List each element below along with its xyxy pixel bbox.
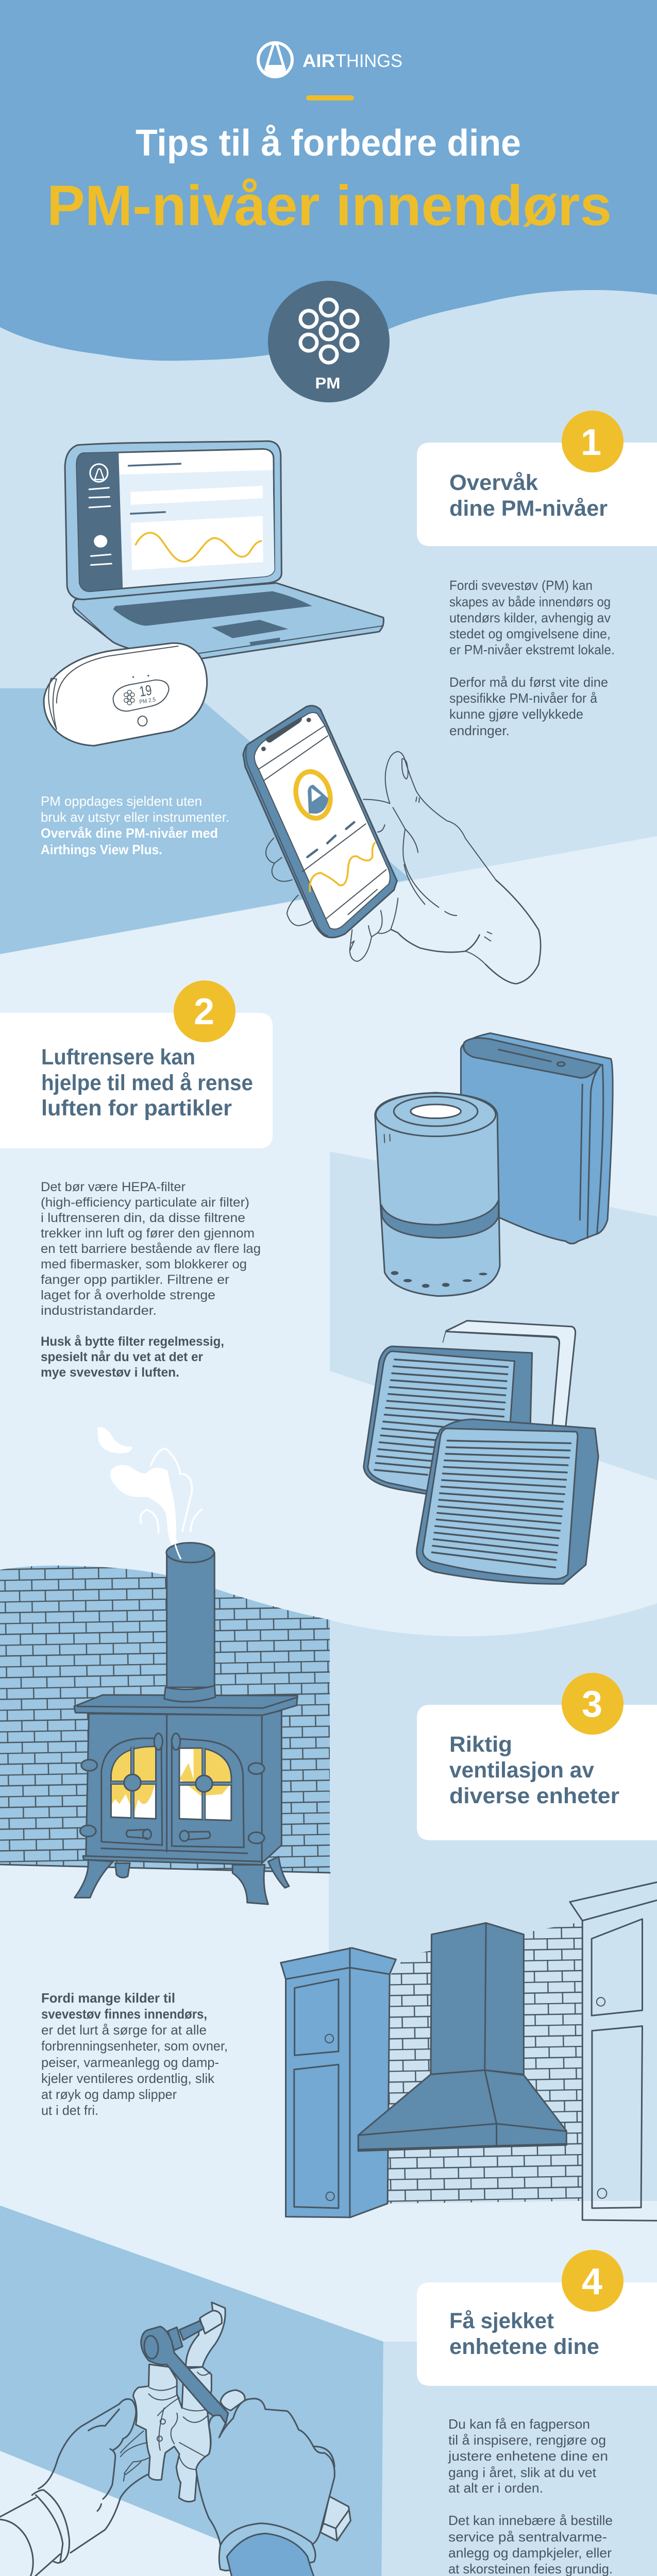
text: tip 2 body: Husk å bytte filter regelmessig,: [41, 1334, 224, 1349]
panel: tip 3 heading card: Riktig: [449, 1732, 512, 1757]
text: tip 1 body: kunne gjøre vellykkede: [449, 706, 583, 722]
callout: monitor with View Plus: Airthings View Plus.: [41, 842, 162, 857]
badge 3: [562, 1673, 624, 1735]
text: tip 3 body: Fordi mange kilder til: [41, 1990, 175, 2006]
panel: tip 3 heading card: [417, 1673, 657, 1840]
text: tip 2 body: trekker inn luft og fører den gjennom: [41, 1226, 255, 1241]
panel: tip 4 heading card: [417, 2250, 657, 2386]
text: tip 1 body: utendørs kilder, avhengig av: [449, 610, 611, 625]
text: tip 1 body: endringer.: [449, 723, 510, 738]
illustration: hands tightening pipe with wrench: [0, 2302, 350, 2576]
text: tip 4 body: [448, 2416, 613, 2576]
text: tip 1 body: [449, 578, 615, 738]
title: Tips til å forbedre dine: [136, 123, 521, 164]
panel: tip 2 heading card: Luftrensere kan: [41, 1045, 195, 1070]
text: tip 2 body: fanger opp partikler. Filtrene er: [41, 1273, 229, 1287]
accent bar: [306, 95, 354, 100]
text: tip 4 body: service på sentralvarme-: [448, 2529, 607, 2545]
logo: Airthings header: AIR: [302, 51, 335, 71]
device reading: PM 2.5: [139, 697, 156, 705]
panel: tip 1 heading card: [417, 411, 657, 546]
illustration: wood stove: [74, 1427, 297, 1904]
badge 1: 1: [581, 422, 601, 463]
illustration: Airthings View Plus device: [44, 643, 207, 745]
panel: tip 2 heading card: [0, 980, 273, 1148]
text: tip 4 body: til å inspisere, rengjøre og: [448, 2432, 606, 2448]
panel: tip 4 heading card: Få sjekket: [449, 2309, 554, 2333]
text: tip 3 body: peiser, varmeanlegg og damp-: [41, 2055, 219, 2070]
text: tip 3 body: er det lurt å sørge for at alle: [41, 2022, 207, 2038]
illustration: laptop: [65, 441, 383, 659]
panel: tip 3 heading card: ventilasjon av: [449, 1758, 594, 1783]
text: tip 2 body: spesielt når du vet at det er: [41, 1350, 203, 1364]
callout: monitor with View Plus: Overvåk dine PM-nivåer med: [41, 825, 218, 841]
illustration: replacement filters: [364, 1320, 598, 1584]
text: tip 4 body: anlegg og dampkjeler, eller: [448, 2545, 612, 2561]
panel: tip 2 heading card: luften for partikler: [41, 1096, 232, 1121]
illustration: hand holding phone: [243, 706, 541, 984]
title: [47, 123, 612, 238]
text: tip 2 body: laget for å overholde strenge: [41, 1288, 215, 1302]
text: tip 2 body: med fibermasker, som blokkerer og: [41, 1257, 247, 1272]
text: tip 1 body: skapes av både innendørs og: [449, 594, 611, 609]
text: tip 2 body: i luftrenseren din, da disse filtrene: [41, 1211, 245, 1225]
icon: PM particles badge: PM: [315, 374, 340, 392]
text: tip 3 body: at røyk og damp slipper: [41, 2087, 177, 2102]
panel: tip 1 heading card: Overvåk: [449, 470, 538, 495]
text: tip 2 body: mye svevestøv i luften.: [41, 1365, 179, 1380]
text: tip 2 body: Det bør være HEPA-filter: [41, 1180, 186, 1194]
panel: tip 2 heading card: hjelpe til med å rense: [41, 1071, 253, 1095]
logo: Airthings header: [258, 43, 402, 77]
text: tip 4 body: justere enhetene dine en: [448, 2448, 608, 2464]
illustration: range hood: [358, 1923, 566, 2151]
badge 3: 3: [582, 1684, 602, 1725]
badge 2: [174, 980, 235, 1042]
text: tip 2 body: industristandarder.: [41, 1303, 157, 1318]
text: tip 1 body: Derfor må du først vite dine: [449, 674, 608, 690]
text: tip 1 body: stedet og omgivelsene dine,: [449, 626, 611, 641]
text: tip 3 body: kjeler ventileres ordentlig, slik: [41, 2071, 215, 2086]
badge 1: [562, 411, 624, 472]
text: tip 4 body: Du kan få en fagperson: [448, 2416, 590, 2432]
text: tip 2 body: (high-efficiency particulate air filter): [41, 1195, 249, 1210]
title: PM-nivåer innendørs: [47, 174, 612, 238]
callout: monitor with View Plus: bruk av utstyr eller instrumenter.: [41, 809, 229, 825]
text: tip 4 body: at alt er i orden.: [448, 2480, 543, 2496]
text: tip 3 body: ut i det fri.: [41, 2103, 98, 2118]
text: tip 3 body: [41, 1990, 228, 2118]
badge 4: 4: [582, 2261, 602, 2302]
badge 4: [562, 2250, 624, 2312]
callout: monitor with View Plus: [41, 793, 229, 857]
illustration: air purifiers: [375, 1033, 613, 1296]
logo: Airthings header: THINGS: [335, 51, 402, 71]
text: tip 4 body: gang i året, slik at du vet: [448, 2465, 597, 2480]
badge 2: 2: [194, 991, 214, 1032]
icon: PM particles badge: [268, 281, 390, 402]
text: tip 1 body: spesifikke PM-nivåer for å: [449, 690, 598, 706]
illustration: brick wall: [0, 1566, 330, 1873]
text: tip 2 body: en tett barriere bestående av flere lag: [41, 1242, 261, 1256]
panel: tip 3 heading card: diverse enheter: [449, 1784, 619, 1808]
callout: monitor with View Plus: PM oppdages sjeldent uten: [41, 793, 202, 809]
text: tip 2 body: [41, 1180, 261, 1380]
text: tip 1 body: Fordi svevestøv (PM) kan: [449, 578, 593, 593]
panel: tip 1 heading card: dine PM-nivåer: [449, 496, 608, 521]
text: tip 3 body: forbrenningsenheter, som ovner,: [41, 2038, 228, 2054]
illustration: kitchen brick wall and cabinets: [281, 1882, 657, 2221]
panel: tip 4 heading card: enhetene dine: [449, 2334, 599, 2359]
text: tip 3 body: svevestøv finnes innendørs,: [41, 2006, 207, 2022]
text: tip 1 body: er PM-nivåer ekstremt lokale.: [449, 642, 615, 657]
text: tip 4 body: Det kan innebære å bestille: [448, 2513, 613, 2528]
device reading: 19: [138, 682, 153, 700]
